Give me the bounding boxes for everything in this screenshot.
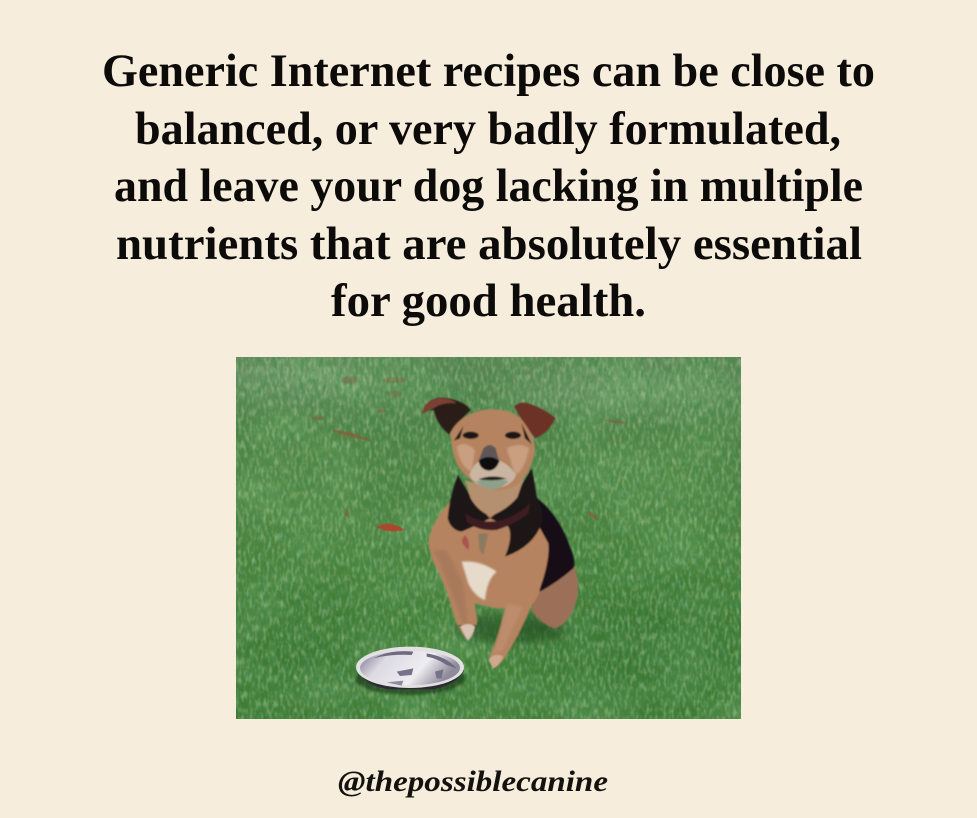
nose (479, 445, 499, 471)
dog tag (462, 535, 469, 550)
heading: for good health. (331, 275, 646, 327)
grass lawn (220, 357, 760, 719)
black back (523, 497, 574, 593)
metal bowl (355, 647, 465, 695)
handle credit: @thepossiblecanine (338, 765, 608, 798)
photo: dog sitting on grass beside a metal bowl (220, 357, 760, 719)
collar (466, 503, 530, 530)
white chest (462, 561, 497, 600)
heading: and leave your dog lacking in multiple (114, 160, 863, 212)
infographic canvas (104, 54, 874, 798)
paw shadow (458, 625, 477, 630)
dog (422, 398, 578, 668)
haunch (532, 563, 578, 628)
shadow under dog (453, 613, 567, 643)
heading: balanced, or very badly formulated, (135, 103, 841, 155)
black eye markings (454, 426, 463, 441)
fallen leaves (312, 376, 630, 531)
paws (460, 624, 475, 640)
black neck markings (448, 475, 490, 532)
right ear (514, 402, 555, 438)
eyes (463, 432, 479, 439)
heading: nutrients that are absolutely essential (116, 218, 862, 270)
chest grey tuft (478, 533, 488, 555)
heading (102, 45, 875, 327)
muzzle (469, 458, 516, 489)
left ear (422, 398, 471, 435)
throat patch (465, 480, 523, 516)
body (429, 502, 549, 668)
heading: Generic Internet recipes can be close to (102, 45, 875, 97)
head (450, 409, 535, 490)
